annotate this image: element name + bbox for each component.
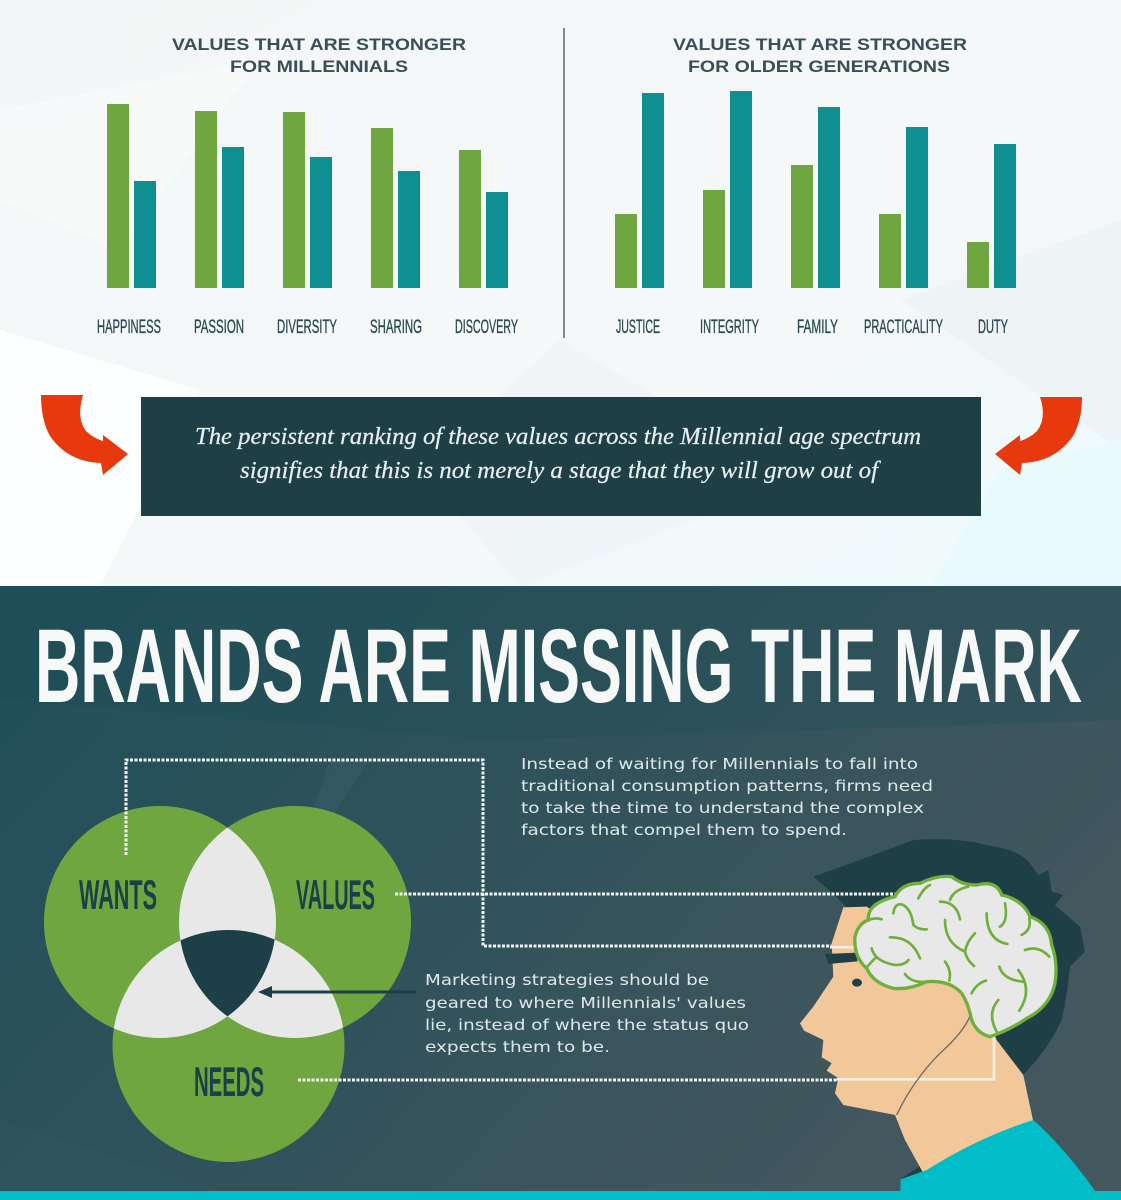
text block: marketing strategies: geared to where Millennials' values	[425, 994, 746, 1012]
footer bar	[0, 1191, 1121, 1200]
shirt	[900, 1120, 1095, 1200]
panel: values stronger for older generations	[615, 35, 1016, 338]
label: wants: WANTS	[79, 871, 157, 918]
connector: values line	[395, 889, 897, 898]
hair	[813, 839, 1085, 1075]
panel: light background	[0, 0, 1121, 586]
venn diagram: NEEDS	[194, 1058, 264, 1105]
text block: consumption patterns: factors that compel them to spend.	[521, 821, 847, 839]
circle: needs	[112, 930, 344, 1162]
connector: needs line	[298, 1078, 838, 1082]
brain	[855, 876, 1056, 1037]
text block: consumption patterns: Instead of waiting for Millennials to fall into	[521, 755, 918, 773]
center overlap	[180, 930, 275, 1016]
circle: values	[179, 806, 411, 1038]
heading: millennials: VALUES THAT ARE STRONGER	[172, 35, 466, 54]
heading: older generations	[673, 35, 967, 76]
eye	[852, 979, 862, 987]
heading: millennials: FOR MILLENNIALS	[230, 57, 408, 76]
text block: marketing strategies: lie, instead of where the status quo	[425, 1016, 749, 1034]
callout: persistent ranking quote: signifies that this is not merely a stage that they will grow out of	[240, 458, 881, 484]
connector: wants line	[126, 760, 835, 946]
bar labels: millennials: PASSION	[194, 317, 244, 338]
arrow: pointer to venn center	[258, 986, 416, 998]
face and neck	[800, 907, 1033, 1173]
text block: consumption patterns	[521, 755, 933, 839]
eyebrow	[825, 953, 857, 964]
heading: millennials	[172, 35, 466, 76]
bar labels: older generations: PRACTICALITY	[864, 317, 943, 338]
bar labels: millennials: SHARING	[370, 317, 422, 338]
bar labels: older generations: INTEGRITY	[700, 317, 759, 338]
bar chart: millennials	[107, 104, 508, 288]
bar labels: millennials	[97, 317, 518, 338]
circle: wants	[44, 806, 276, 1038]
connector: white line across face	[830, 947, 994, 1079]
panel: values stronger for millennials	[97, 35, 518, 338]
earphone wire	[897, 1007, 973, 1115]
bar labels: older generations	[616, 317, 1008, 338]
heading: older generations: FOR OLDER GENERATIONS	[688, 57, 950, 76]
venn diagram	[44, 806, 411, 1162]
arrow: left red curved	[41, 395, 128, 475]
panel: dark background	[0, 586, 1121, 1191]
bar labels: millennials: HAPPINESS	[97, 317, 161, 338]
bar labels: older generations: FAMILY	[797, 317, 838, 338]
bar labels: millennials: DISCOVERY	[455, 317, 518, 338]
bar labels: millennials: DIVERSITY	[277, 317, 337, 338]
venn diagram: VALUES	[296, 871, 375, 918]
bar chart: older generations	[615, 91, 1016, 288]
callout: persistent ranking quote	[141, 397, 981, 516]
bar labels: older generations: JUSTICE	[616, 317, 660, 338]
illustration: head with brain	[395, 839, 1095, 1200]
text block: marketing strategies: Marketing strategies should be	[425, 971, 709, 989]
arrow: right red curved	[995, 397, 1082, 475]
text block: marketing strategies: expects them to be.	[425, 1038, 610, 1056]
text block: marketing strategies	[425, 971, 749, 1056]
text block: consumption patterns: to take the time to understand the complex	[521, 799, 924, 817]
bar labels: older generations: DUTY	[978, 317, 1008, 338]
text block: consumption patterns: traditional consumption patterns, firms need	[521, 777, 933, 795]
callout: persistent ranking quote: The persistent ranking of these values across the Millennial age spectrum	[195, 424, 921, 450]
shirt collar shadow	[900, 1165, 928, 1190]
overlaps	[114, 828, 343, 1038]
heading: older generations: VALUES THAT ARE STRONGER	[673, 35, 967, 54]
